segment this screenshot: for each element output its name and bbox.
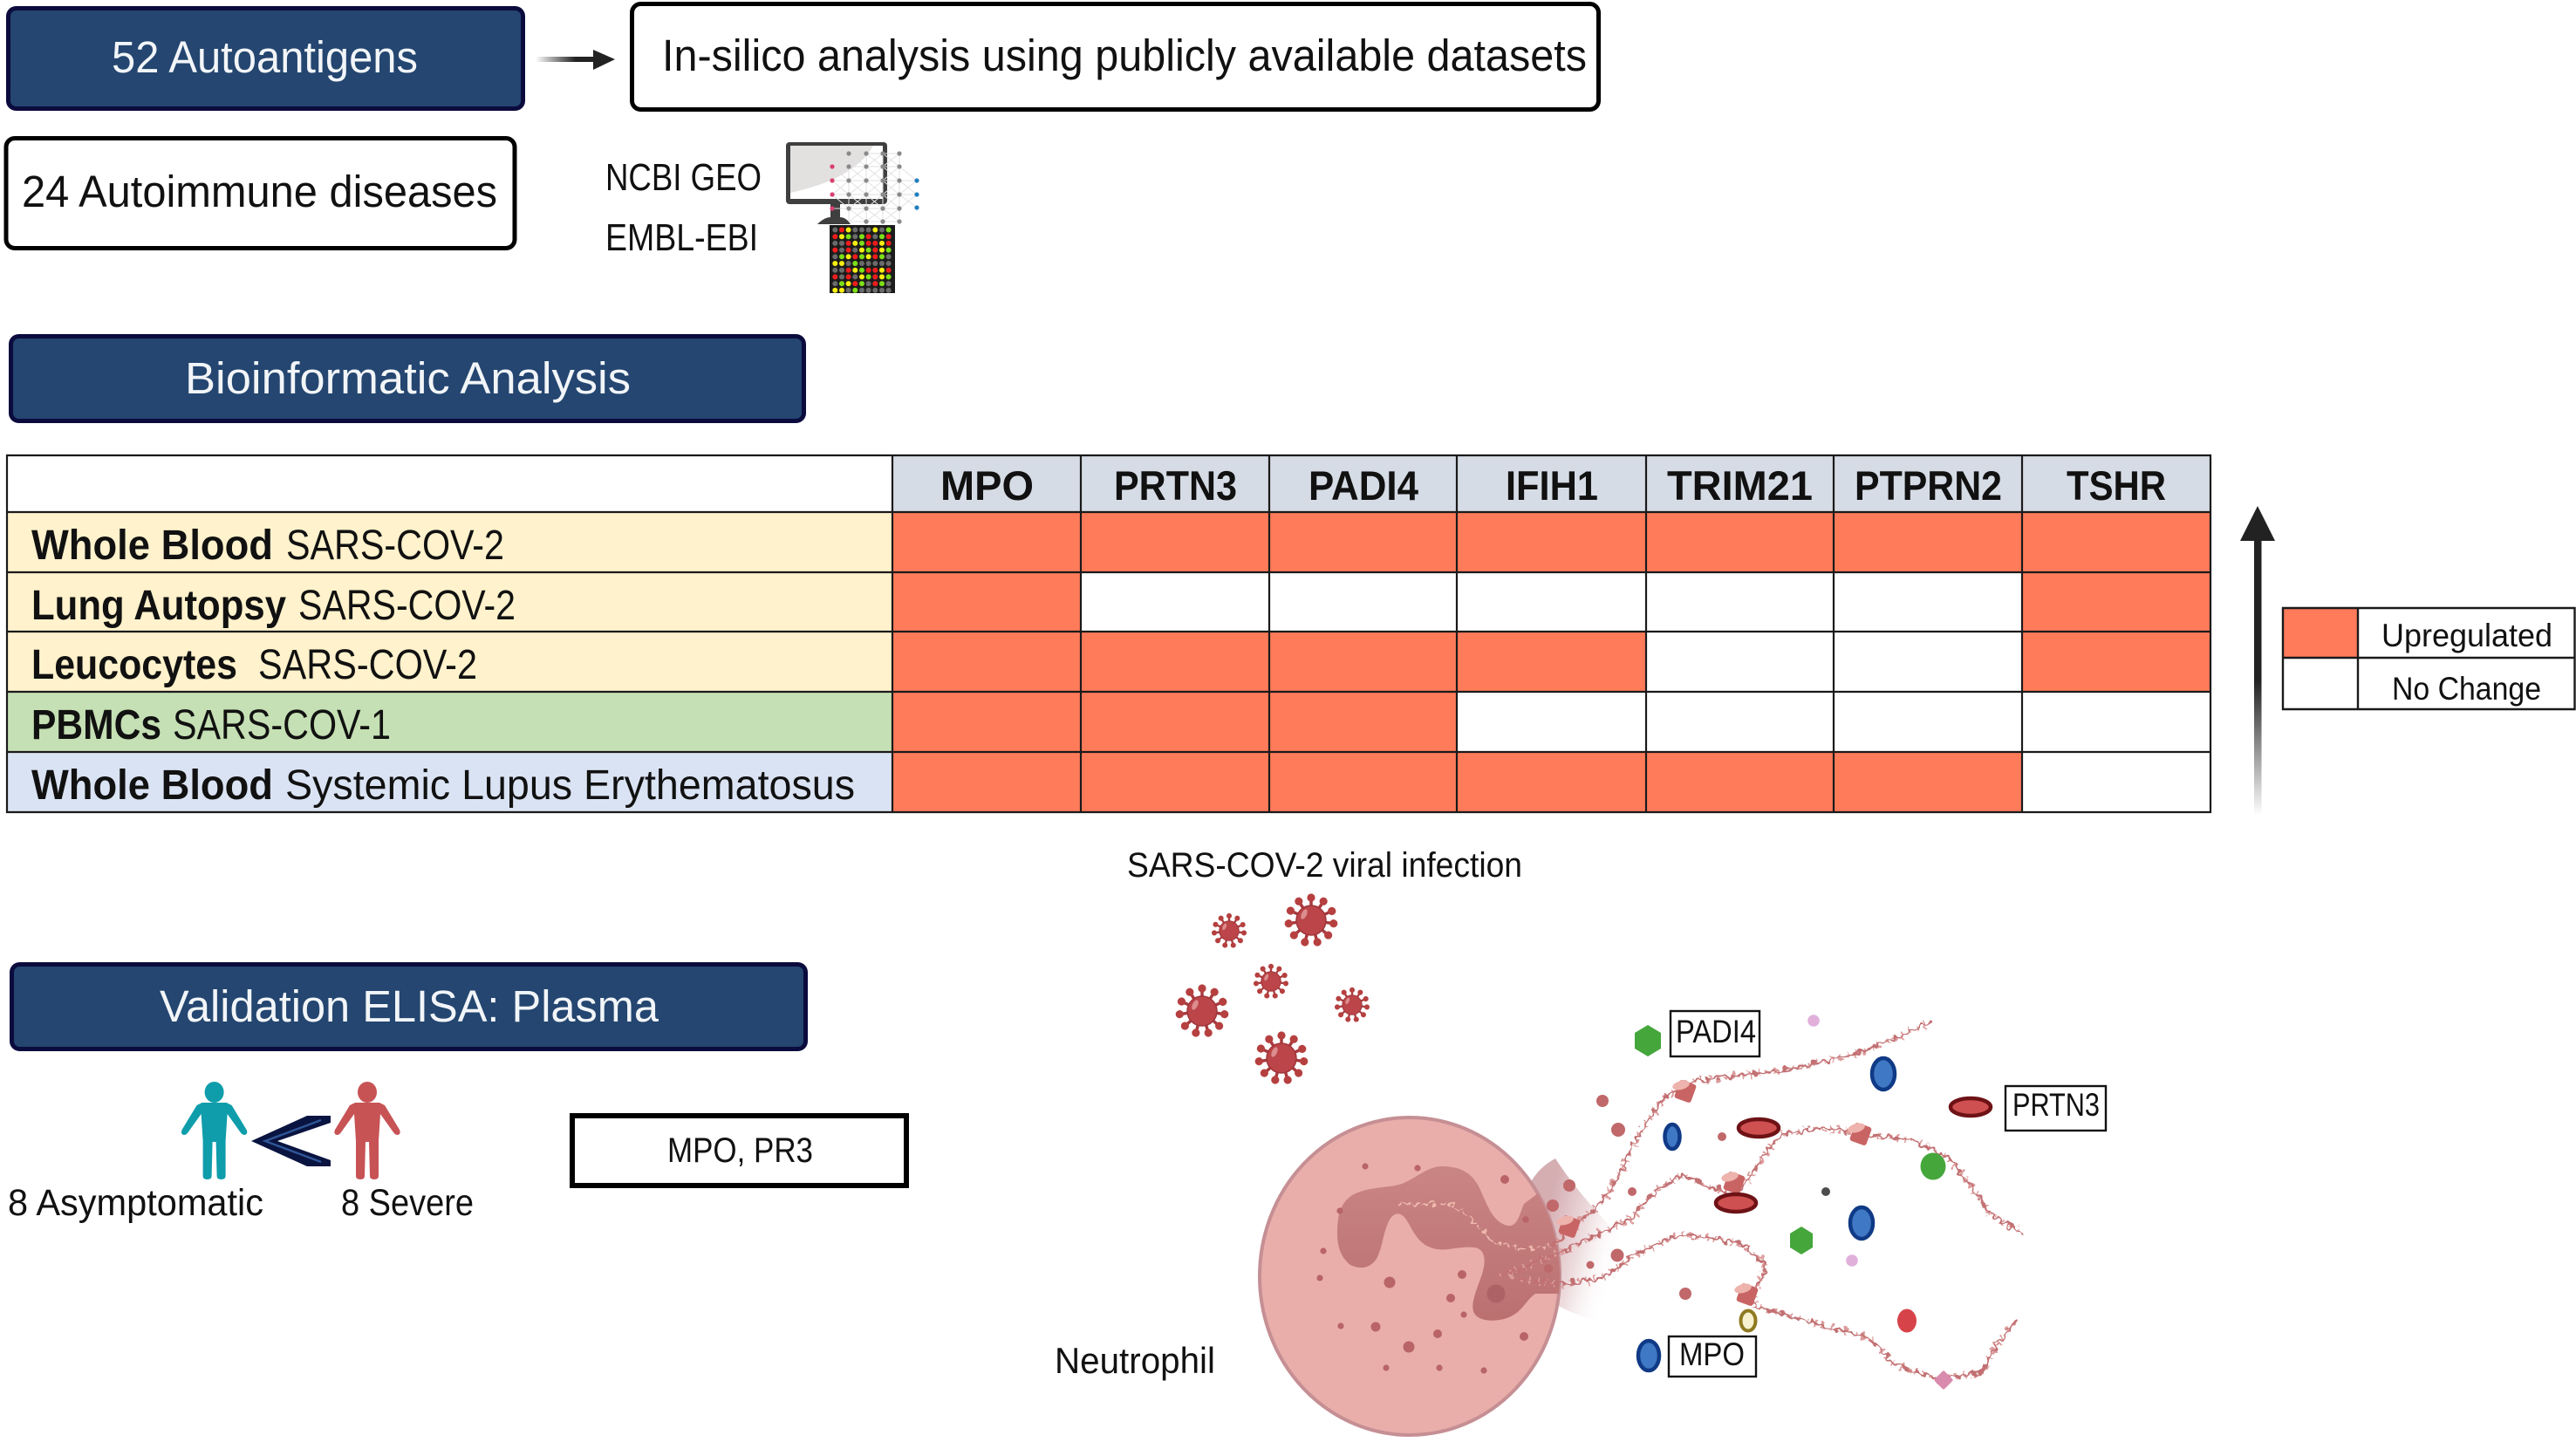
text: dataset sources — [605, 156, 762, 259]
table grid — [7, 455, 2210, 812]
table row labels: Lung Autopsy — [31, 583, 286, 629]
table header row: TSHR — [2067, 462, 2166, 509]
legend — [2283, 608, 2575, 709]
heading: 52 Autoantigens — [9, 9, 523, 108]
label: PADI4 — [1671, 1011, 1759, 1056]
table row labels: SARS-COV-2 — [286, 523, 504, 569]
chromatin inside nucleus — [1396, 1204, 1548, 1249]
legend: Upregulated — [2381, 618, 2552, 653]
table row labels: SARS-COV-1 — [173, 702, 391, 748]
extracellular DNA strands dark — [1500, 1022, 2020, 1380]
heading: Bioinformatic Analysis: Bioinformatic Analysis — [185, 353, 631, 403]
table header row: TRIM21 — [1667, 462, 1813, 509]
table row labels — [7, 512, 892, 812]
text: dataset sources: NCBI GEO — [605, 156, 762, 199]
table row labels: Whole Blood — [31, 523, 273, 569]
granules inside cell — [1316, 1163, 1553, 1374]
arrow: autoantigens to in-silico analysis — [536, 50, 615, 70]
red PRTN3 proteins — [1716, 1098, 1991, 1212]
label: PADI4: PADI4 — [1676, 1014, 1756, 1049]
released granules — [1547, 1095, 1726, 1300]
histone proteins — [1555, 1079, 1953, 1390]
text: cohort labels: 8 Severe — [341, 1182, 474, 1224]
heading: Bioinformatic Analysis — [10, 337, 804, 420]
table header row: MPO — [940, 462, 1034, 509]
box: 24 autoimmune diseases: 24 Autoimmune diseases — [22, 167, 497, 216]
icon: virus particles — [1175, 893, 1370, 1085]
halo around rupture — [1525, 1158, 1623, 1320]
table header row: PTPRN2 — [1855, 462, 2002, 509]
icon: computer with neural network — [786, 142, 919, 224]
text: cohort labels — [8, 1182, 474, 1224]
extracellular DNA rungs — [1500, 1022, 2020, 1380]
arrow: vertical expression scale — [2240, 506, 2275, 815]
table header row: PADI4 — [1308, 462, 1418, 509]
table row labels: Whole Blood — [31, 762, 273, 809]
table row labels: PBMCs — [31, 702, 161, 748]
heading: Validation ELISA — [12, 965, 806, 1049]
red and gold particles — [1741, 1309, 1917, 1333]
legend: No Change — [2392, 671, 2541, 707]
table row labels: SARS-COV-2 — [258, 642, 477, 688]
label: MPO: MPO — [1679, 1336, 1745, 1372]
box: in-silico analysis: In-silico analysis using publicly available datasets — [662, 31, 1587, 80]
label: PRTN3: PRTN3 — [2012, 1087, 2100, 1123]
green proteins — [1635, 1025, 1945, 1254]
pink and grey particles — [1807, 1015, 1858, 1267]
box: MPO, PR3: MPO, PR3 — [667, 1131, 813, 1170]
table header row — [7, 455, 2210, 512]
heading: Validation ELISA: Validation ELISA: Plasma — [160, 981, 659, 1031]
text: dataset sources: EMBL-EBI — [605, 216, 758, 259]
text: cohort labels: 8 Asymptomatic — [8, 1182, 263, 1224]
icon: severe person — [334, 1082, 400, 1179]
text: viral infection label: SARS-COV-2 viral infection — [1127, 846, 1522, 885]
box: MPO, PR3 — [572, 1116, 906, 1186]
table header row: PRTN3 — [1114, 462, 1237, 509]
table row labels: Systemic Lupus Erythematosus — [285, 762, 855, 809]
icon: microarray — [830, 225, 895, 293]
table upregulated cells — [892, 512, 2210, 812]
blue MPO proteins — [1638, 1058, 1895, 1370]
illustration: neutrophil cell with NET — [1260, 1015, 2020, 1435]
icon: less-than chevron — [251, 1116, 331, 1166]
box: in-silico analysis — [632, 3, 1598, 110]
cell body — [1260, 1117, 1560, 1435]
text: neutrophil label: Neutrophil — [1055, 1340, 1215, 1381]
table row labels: SARS-COV-2 — [298, 583, 516, 629]
nucleus — [1337, 1166, 1570, 1321]
table: expression matrix — [7, 455, 2210, 812]
heading: 52 Autoantigens: 52 Autoantigens — [112, 32, 418, 82]
table header row: IFIH1 — [1506, 462, 1598, 509]
box: 24 autoimmune diseases — [6, 138, 515, 248]
label: PRTN3 — [2005, 1086, 2106, 1131]
table row labels: Leucocytes — [31, 642, 237, 688]
icon: asymptomatic person — [181, 1082, 247, 1179]
